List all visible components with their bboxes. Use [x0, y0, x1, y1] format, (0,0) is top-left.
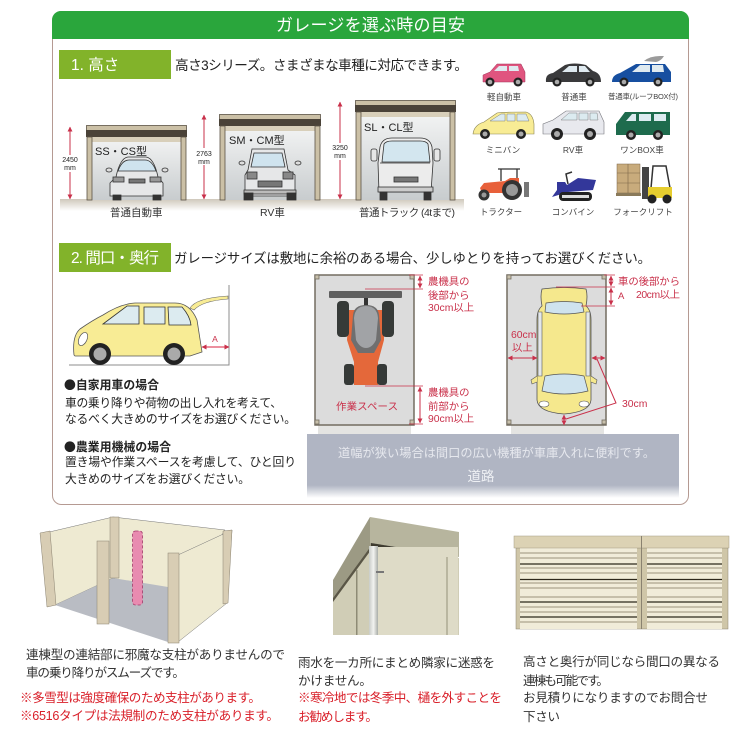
- vehicle: car with roof box: 普通車(ルーフBOX付): [608, 91, 678, 101]
- vehicle: RV: [543, 111, 604, 155]
- ground strip: [60, 199, 464, 211]
- plan: car in garage: [507, 275, 680, 425]
- vehicle: one box car: ワンBOX車: [620, 145, 664, 155]
- text block: private cars: ●自家用車の場合: [64, 376, 159, 393]
- garage labels: RV車: [260, 206, 285, 219]
- height dimension: 2450 mm: [60, 127, 82, 199]
- vehicle: tractor: [478, 169, 529, 217]
- text: no pillar benefit: 車の乗り降りがスムーズです。: [26, 665, 185, 680]
- side clearance 60 cm: 以上: [512, 342, 533, 354]
- text: pillar notes: ※多雪型は強度確保のため支柱があります。: [20, 690, 261, 705]
- text: connected shutters description: 下さい: [523, 710, 560, 724]
- garage: SL CL: SL・CL型: [364, 120, 414, 134]
- front clearance dimension: 農機具の: [428, 386, 470, 399]
- text: gutter description: かけません。: [298, 674, 372, 688]
- text: gutter note: ※寒冷地では冬季中、樋を外すことを: [298, 690, 502, 705]
- truck front view: [371, 138, 440, 200]
- height dimension: 2763 mm: mm: [198, 159, 210, 166]
- text: gutter description: [298, 655, 495, 688]
- rear clearance dimension: 後部から: [428, 289, 470, 302]
- side clearance 30 cm: [564, 358, 647, 425]
- section heading: height: [59, 50, 171, 79]
- garage: SM CM: [219, 114, 321, 200]
- main panel: [52, 11, 689, 504]
- illustration: minivan with open hatch: A: [212, 334, 218, 344]
- text: no pillar benefit: [26, 648, 285, 680]
- illustration: minivan with open hatch: [69, 285, 229, 365]
- text block: private cars: 車の乗り降りや荷物の出し入れを考えて、: [65, 396, 282, 410]
- side clearance 60 cm: 60cm: [511, 330, 536, 341]
- road: [307, 434, 679, 498]
- garage: SM CM: SM・CM型: [229, 133, 285, 147]
- section heading: width and depth: 2. 間口・奥行: [71, 249, 159, 267]
- text block: farm machinery: 大きめのサイズをお選びください。: [65, 472, 250, 486]
- rear clearance dimension: 30cm以上: [428, 302, 474, 314]
- vehicle: one box car: [616, 112, 670, 155]
- rear clearance dimension: 20cm以上: [636, 289, 680, 301]
- vehicle: ordinary car: [546, 64, 601, 102]
- height dimension: 2763 mm: [194, 115, 216, 199]
- width and depth description: ガレージサイズは敷地に余裕のある場合、少しゆとりを持ってお選びください。: [174, 250, 651, 266]
- section heading: width and depth: [59, 243, 171, 272]
- height dimension: 2450 mm: mm: [64, 165, 76, 172]
- road: 道幅が狭い場合は間口の広い機種が車庫入れに便利です。: [338, 445, 655, 460]
- vehicle: minivan: [473, 112, 534, 155]
- text: connected shutters description: 連棟も可能です。: [523, 674, 609, 688]
- vehicle: tractor: トラクター: [480, 207, 522, 217]
- front clearance dimension: 90cm以上: [428, 413, 474, 425]
- title bar: ガレージを選ぶ時の目安: [276, 16, 465, 35]
- removed pillar highlighted: [132, 531, 142, 605]
- section heading: height: 1. 高さ: [71, 56, 119, 74]
- vehicle: car with roof box: [608, 56, 678, 101]
- height dimension: 3250 mm: mm: [334, 153, 346, 160]
- road: 道路: [468, 469, 495, 484]
- text: gutter note: お勧めします。: [298, 710, 378, 724]
- garage labels: 普通自動車: [110, 206, 162, 219]
- vehicle: kei car: [483, 64, 525, 102]
- height dimension: 2450 mm: 2450: [62, 157, 78, 164]
- rear clearance dimension: 車の後部から: [618, 275, 680, 288]
- text: gutter note: [298, 690, 502, 724]
- garage labels: 普通トラック (4tまで): [359, 206, 455, 219]
- rear clearance dimension: A: [618, 291, 625, 302]
- rear clearance dimension: [365, 275, 474, 314]
- RV front view: [239, 149, 301, 200]
- illustration: connected garage interior: [40, 517, 232, 643]
- text: connected shutters description: [523, 654, 720, 724]
- front clearance dimension: [365, 386, 474, 425]
- vehicle: combine: コンバイン: [552, 207, 594, 217]
- text block: private cars: [64, 376, 296, 426]
- rear clearance dimension: 農機具の: [428, 275, 470, 288]
- vehicle: RV: RV車: [563, 145, 584, 155]
- title bar: [52, 11, 689, 39]
- vehicle: kei car: 軽自動車: [487, 92, 521, 102]
- height dimension: 3250 mm: 3250: [332, 145, 348, 152]
- text: connected shutters description: 高さと奥行が同じなら間口の異なる: [523, 654, 720, 669]
- car front view: [106, 157, 168, 200]
- front clearance dimension: 前部から: [428, 400, 470, 413]
- car top view: [531, 288, 597, 414]
- text: gutter description: 雨水を一カ所にまとめ隣家に迷惑を: [298, 655, 495, 670]
- work space label: 作業スペース: [336, 400, 398, 413]
- garage: SS CS: [86, 126, 187, 200]
- garage: SS CS: SS・CS型: [95, 144, 147, 158]
- garage: SL CL: [355, 100, 456, 200]
- height dimension: 3250 mm: [330, 102, 352, 199]
- text block: farm machinery: 置き場や作業スペースを考慮して、ひと回り: [65, 455, 296, 469]
- height description: 高さ3シリーズ。さまざまな車種に対応できます。: [175, 57, 468, 73]
- side clearance 60 cm: [508, 330, 537, 358]
- vehicle: minivan: ミニバン: [486, 145, 520, 155]
- text: pillar notes: ※6516タイプは法規制のため支柱があります。: [20, 709, 279, 723]
- plan: tractor in garage: [315, 275, 474, 425]
- text: pillar notes: [20, 690, 279, 723]
- text block: farm machinery: ●農業用機械の場合: [64, 438, 171, 455]
- vehicle: combine: [552, 172, 596, 217]
- tractor top view: [329, 291, 402, 385]
- garage labels: [110, 206, 455, 219]
- driveway strips: [318, 425, 411, 435]
- side clearance 30 cm: 30cm: [622, 399, 647, 410]
- text: no pillar benefit: 連棟型の連結部に邪魔な支柱がありませんので: [26, 648, 285, 662]
- text: connected shutters description: お見積りになりますのでお問合せ: [523, 691, 708, 705]
- photo: gutter on garage corner: [333, 517, 459, 635]
- height dimension: 2763 mm: 2763: [196, 151, 212, 158]
- vehicle: forklift: [613, 164, 673, 217]
- vehicle: forklift: フォークリフト: [613, 207, 673, 217]
- illustration: connected shutters: [514, 536, 729, 629]
- text block: farm machinery: [64, 438, 296, 486]
- text block: private cars: なるべく大きめのサイズをお選びください。: [65, 412, 296, 426]
- rear clearance dimension: [556, 275, 680, 306]
- vehicle: ordinary car: 普通車: [561, 92, 587, 102]
